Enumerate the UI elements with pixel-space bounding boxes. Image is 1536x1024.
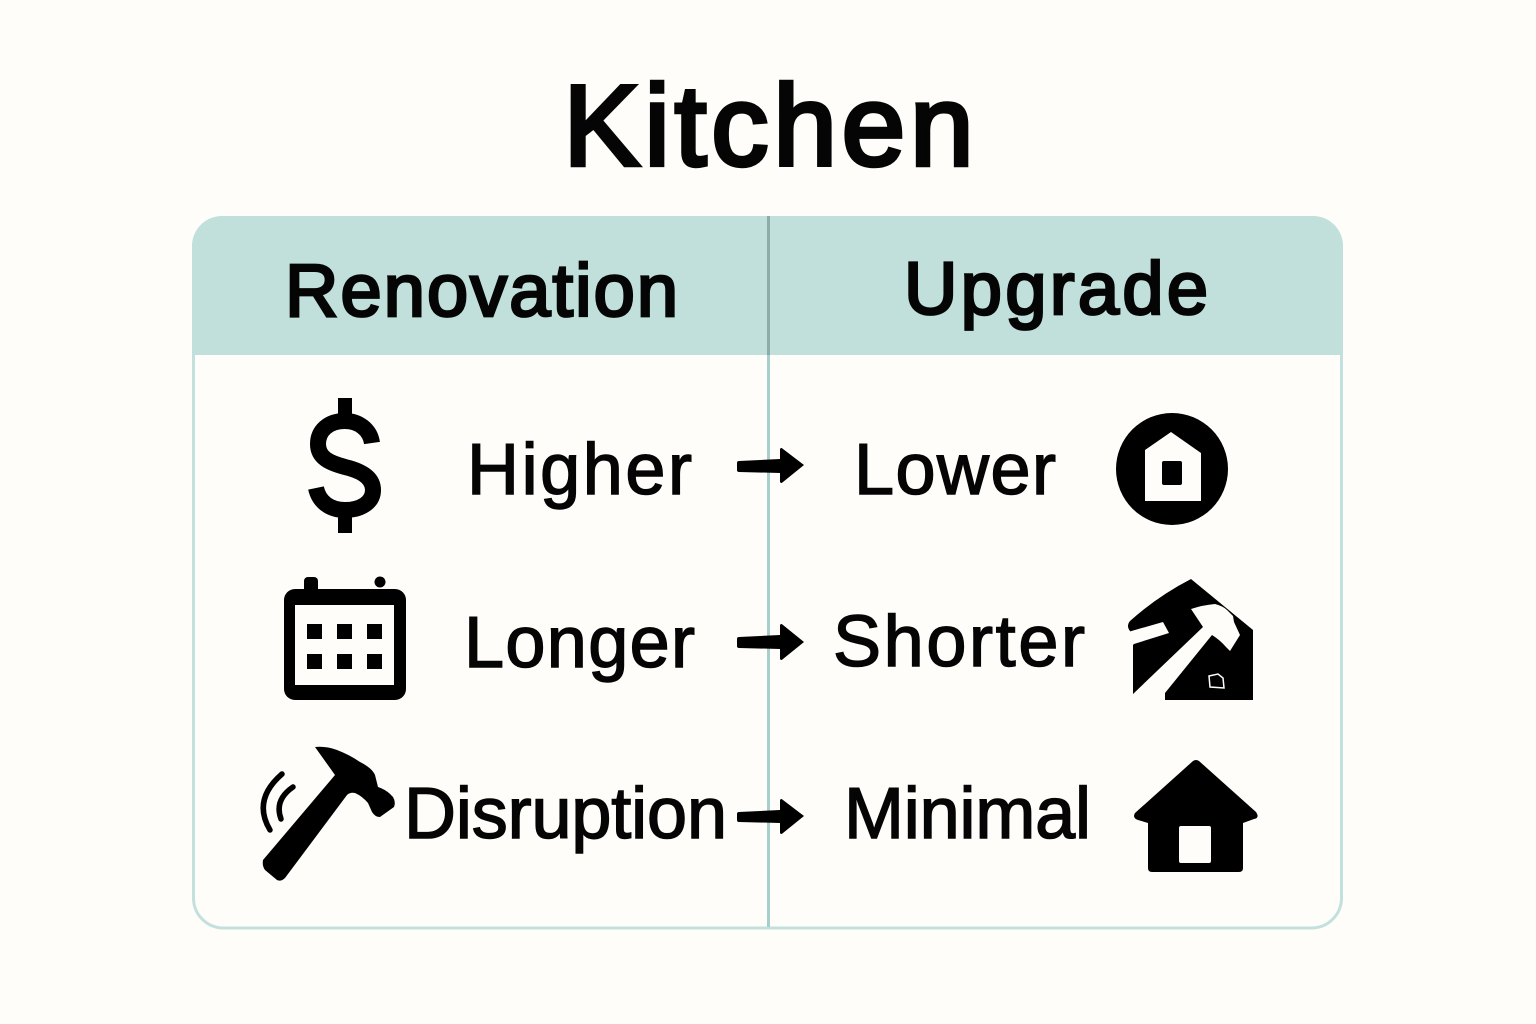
arrow: disruption [737,799,804,834]
icon: house with hammer [1128,579,1253,702]
icon: dollar sign [316,398,373,533]
arrow: time [737,624,804,660]
label: Longer: Longer [464,603,695,683]
table header band [192,216,1343,355]
arrow: cost [737,448,804,483]
column divider [767,216,770,927]
title: Kitchen [564,63,974,190]
icon: hammer with vibration [263,747,395,881]
label: Shorter: Shorter [833,602,1085,682]
icon: calendar [284,576,406,700]
label: Lower: Lower [854,430,1056,510]
icon: house in circle [1116,413,1228,525]
label: Higher: Higher [467,430,692,510]
icon: house [1134,760,1258,872]
panel: comparison table [192,216,1343,928]
heading: Renovation: Renovation [285,249,678,332]
heading: Upgrade: Upgrade [904,247,1208,330]
label: Minimal: Minimal [844,774,1091,854]
label: Disruption: Disruption [404,774,727,854]
